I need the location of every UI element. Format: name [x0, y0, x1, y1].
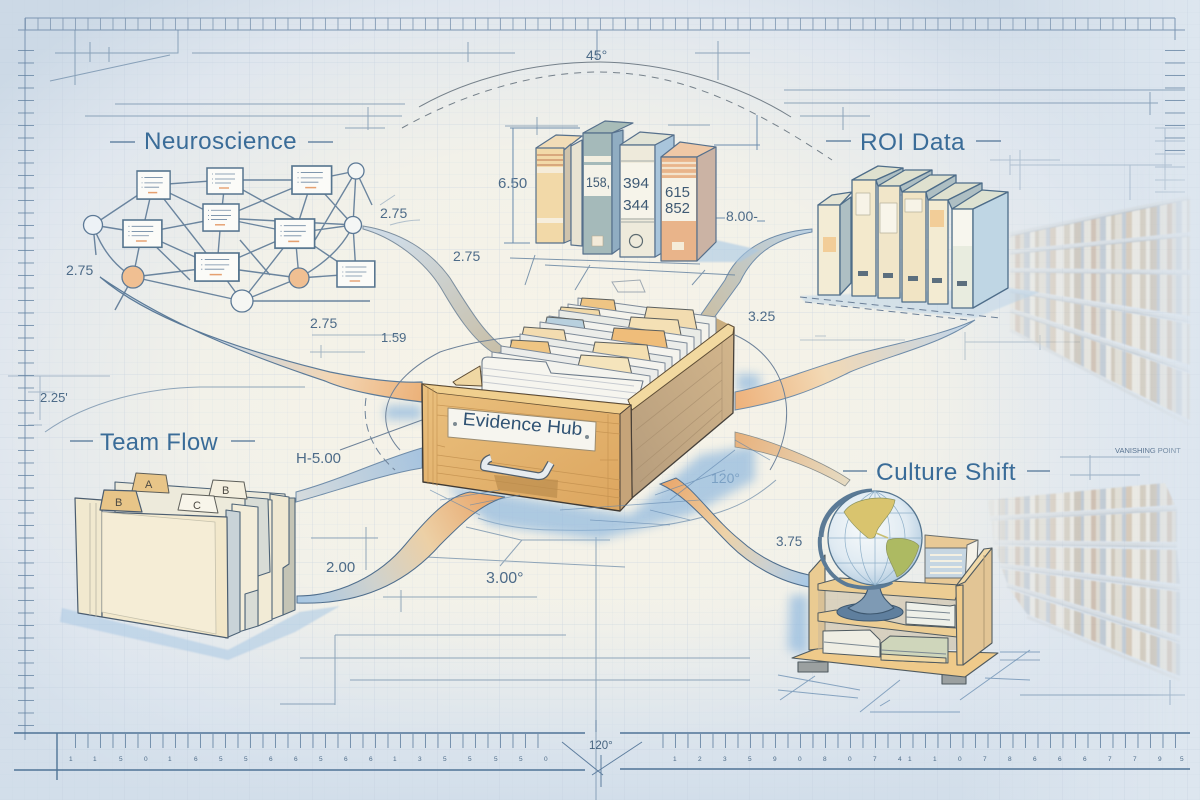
binder 4 cream with 394 344: 344 — [623, 198, 649, 214]
measurement labels: H-5.00 — [296, 450, 341, 467]
evidence hub label plate — [448, 408, 596, 451]
binder 4 cream with 394 344: 394 — [623, 176, 649, 192]
drawer handle — [484, 458, 551, 476]
heading: Neuroscience: Neuroscience — [144, 128, 297, 155]
heading: Culture Shift: Culture Shift — [876, 459, 1016, 486]
measurement labels: 2.75 — [453, 248, 480, 264]
network nodes — [84, 163, 364, 312]
panel: culture shift shelf and globe — [792, 491, 998, 684]
background library: upper right — [1010, 197, 1190, 425]
ROI binder 1 — [818, 192, 852, 295]
measurement labels: 3.25 — [748, 308, 775, 324]
shelf right panel — [956, 548, 992, 665]
panel: center colored binders — [536, 121, 760, 262]
folder tabs back: C — [193, 500, 201, 512]
folder tabs back: B — [222, 485, 229, 497]
panel: central card drawer — [422, 298, 734, 511]
drawer right side — [631, 327, 734, 498]
binder 5 orange with 615 852: 615 — [665, 185, 690, 201]
ROI binder 5 — [928, 183, 982, 304]
measurement labels: 2.00 — [326, 559, 355, 576]
shelf back paper — [925, 535, 978, 585]
bottom books — [823, 630, 948, 663]
construction marks under binders — [510, 255, 735, 292]
background library: lower right — [987, 483, 1180, 680]
front folder: B — [115, 497, 122, 509]
measurement labels: 8.00- — [726, 208, 758, 224]
network note boxes — [123, 166, 375, 287]
measurement labels: 120° — [711, 470, 740, 486]
measurement labels: 2.75 — [66, 262, 93, 278]
arcs around drawer — [340, 334, 787, 470]
globe stand — [820, 491, 903, 621]
binder 1 orange — [536, 135, 582, 243]
ROI shadow — [800, 288, 1040, 318]
shadow under binders — [697, 240, 760, 262]
measurement labels: 45° — [586, 47, 607, 63]
ribbon: ROI upper — [700, 229, 812, 326]
wash fading library into margin — [1140, 170, 1200, 730]
folder tabs back — [132, 473, 247, 513]
ribbon: ROI lower — [735, 320, 975, 410]
measurement labels: 2.75 — [310, 315, 337, 331]
bottom ruler: 120° — [589, 740, 613, 752]
measurement labels: 3.75 — [776, 534, 802, 549]
measurement labels: 2.75 — [380, 205, 407, 221]
front folder — [75, 490, 228, 638]
ribbon: neuroscience upper — [363, 226, 507, 354]
dimension ticks near books — [380, 115, 765, 243]
measurement labels: 1.59 — [381, 330, 406, 345]
drawer front — [422, 384, 632, 511]
dashed arc with 45 degree mark — [402, 30, 832, 160]
shelf base plate — [792, 648, 998, 684]
panel: neuroscience network — [84, 163, 375, 312]
handle shadow — [494, 475, 558, 498]
binder 3 teal with 158: 158, — [586, 174, 610, 190]
front card with tab — [482, 357, 643, 408]
panel: ROI binders — [800, 166, 1040, 320]
index cards and tabs — [492, 298, 716, 418]
binder 5 orange with 615 852 — [661, 142, 716, 261]
ROI binder 3 — [878, 170, 932, 298]
measurement labels: 3.00° — [486, 570, 524, 587]
evidence hub label plate: Evidence Hub — [462, 409, 583, 439]
drawer interior — [480, 318, 734, 405]
ribbon: team flow upper — [296, 448, 422, 502]
stack of books on middle shelf — [906, 602, 955, 627]
binder 4 cream with 394 344 — [620, 132, 674, 257]
construction marks under shelf — [778, 650, 1040, 712]
measurement labels — [40, 47, 1181, 587]
measurement labels: 6.50 — [498, 175, 527, 192]
ribbon: neuroscience lower — [100, 277, 422, 402]
binder 2 thin — [571, 140, 582, 246]
heading: ROI Data: ROI Data — [860, 129, 965, 156]
upper shelf board — [818, 578, 960, 600]
bottom ruler: 1235908074110786667795 — [673, 756, 1184, 763]
folder stack back — [115, 482, 295, 638]
globe — [828, 491, 922, 585]
ROI base dashed line — [800, 297, 1000, 320]
panel: team flow folders — [60, 473, 340, 660]
drawer right rim — [628, 324, 734, 410]
ROI binder 6 — [952, 190, 1008, 308]
ROI binder 2 — [852, 166, 903, 296]
ribbon: culture shift — [660, 478, 809, 587]
ROI binder 4 — [902, 175, 956, 302]
bottom ruler: 11501655665661355550 — [69, 756, 548, 763]
binder 5 orange with 615 852: 852 — [665, 201, 690, 217]
heading: Team Flow: Team Flow — [100, 429, 218, 456]
bottom ruler — [14, 720, 1190, 787]
measurement labels: VANISHING POINT — [1115, 446, 1181, 455]
hatch under drawer — [430, 440, 770, 525]
drawer rim left back — [453, 366, 482, 386]
shelf back panel — [818, 590, 956, 650]
ribbon: right middle — [735, 432, 850, 486]
shelf left panel — [809, 555, 825, 650]
blue wash under drawer — [385, 373, 808, 655]
middle shelf board — [818, 610, 957, 637]
folder floor wash — [60, 606, 340, 660]
measurement labels: 2.25' — [40, 390, 68, 405]
ribbon: team flow lower — [297, 492, 505, 603]
folder tabs back: A — [145, 479, 153, 491]
binder 3 teal with 158 — [583, 121, 633, 254]
